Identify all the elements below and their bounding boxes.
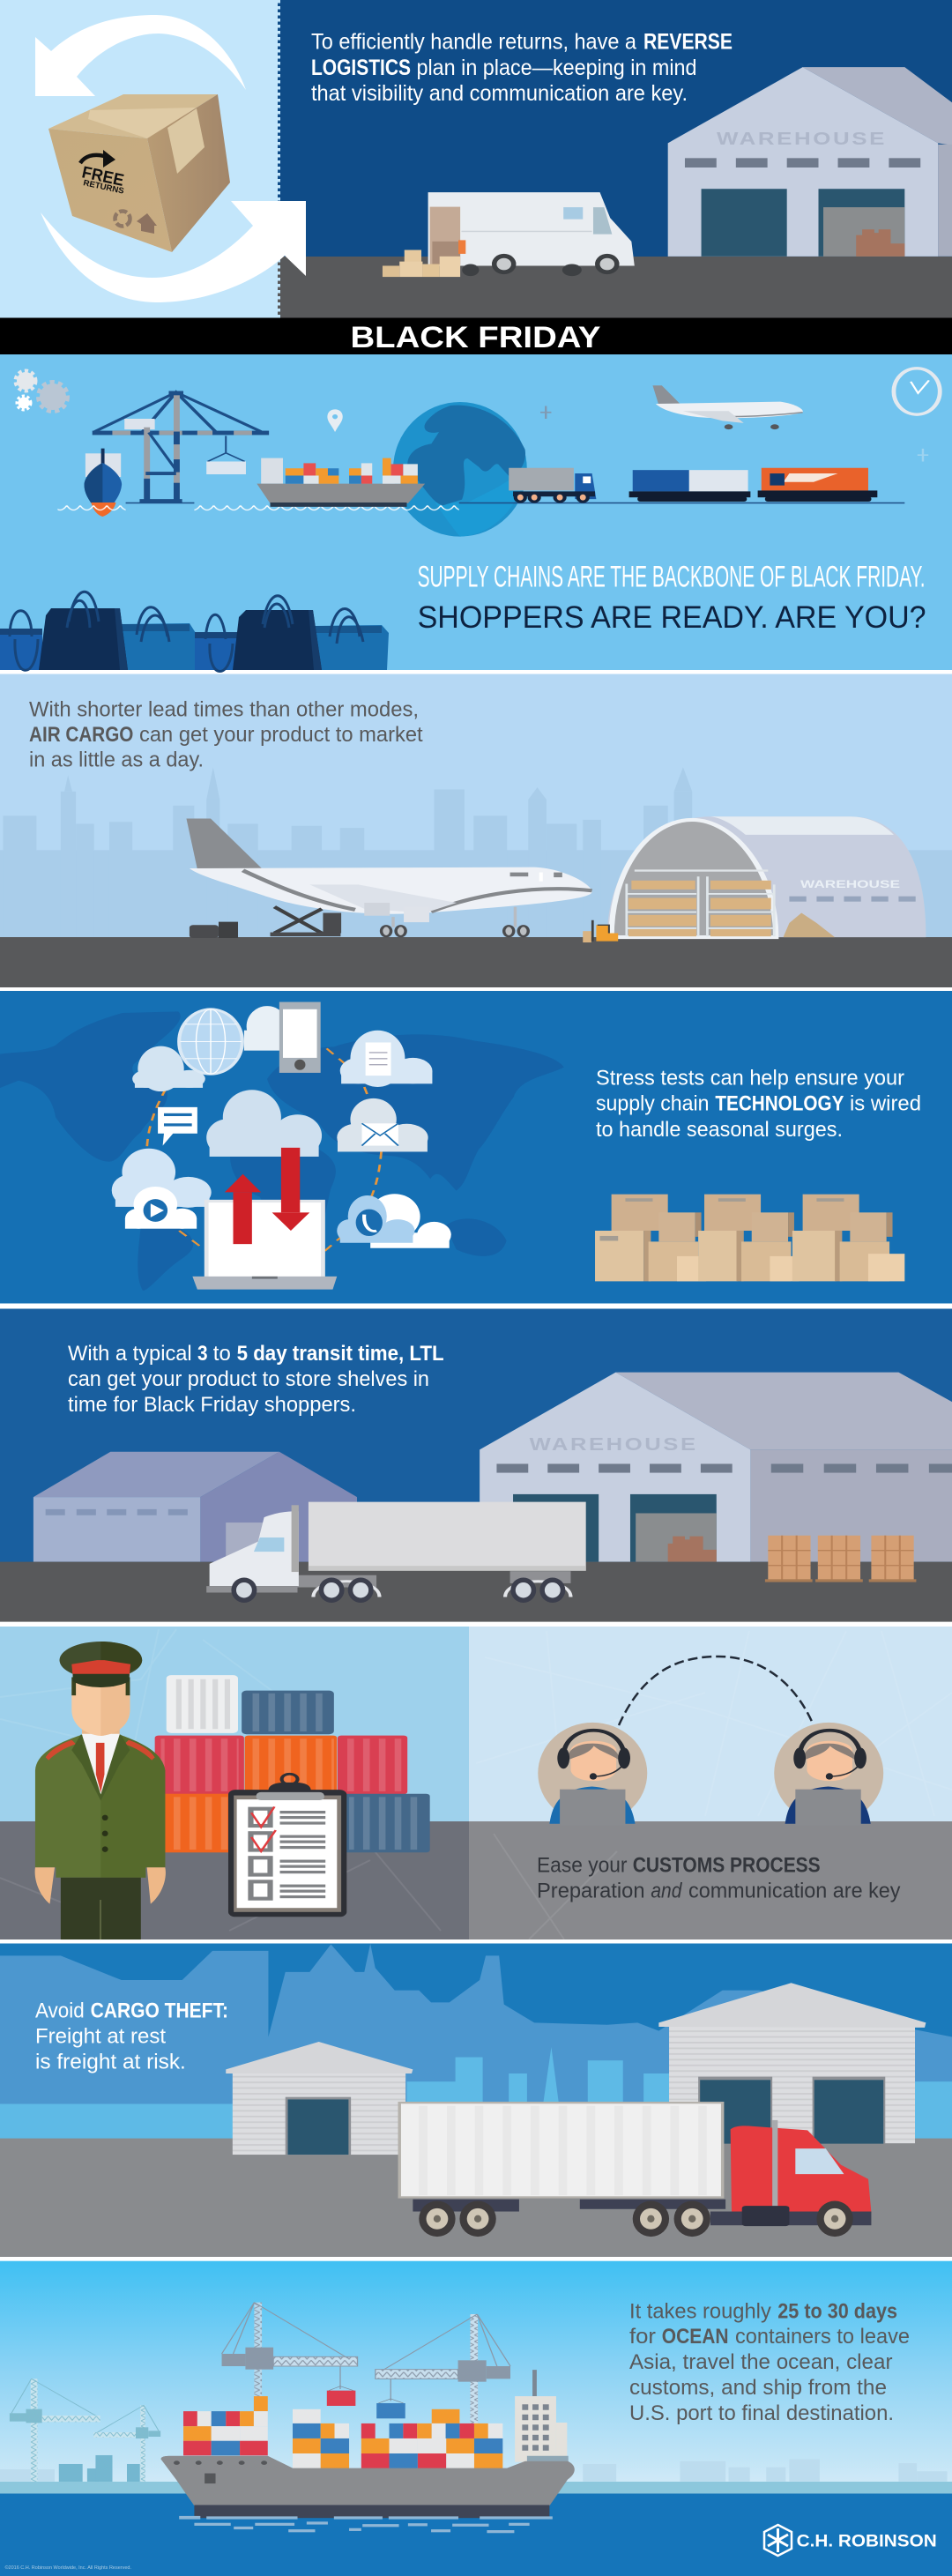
text: LTL: can get your product to store shelves in — [68, 1367, 429, 1391]
arrow: download — [272, 1148, 309, 1231]
text: technology: supply chain — [596, 1092, 709, 1116]
text: LTL: With a typical — [68, 1342, 192, 1366]
icon: forklift — [583, 920, 618, 942]
text: customs process: and — [651, 1880, 682, 1903]
icon: airplane — [652, 385, 803, 429]
icon: parcels — [383, 250, 460, 277]
icon: gears — [16, 371, 67, 411]
arrow: dashed connection arc — [619, 1657, 813, 1725]
icon: central cloud — [206, 1090, 322, 1157]
faint network lines — [0, 1629, 952, 1939]
warehouse sign: WAREHOUSE — [800, 878, 900, 890]
icon: call agent right — [774, 1723, 883, 1826]
icon: location pin — [327, 409, 343, 432]
arrow: upload — [225, 1174, 261, 1244]
icon: clock — [894, 369, 940, 414]
text: technology: is wired — [850, 1092, 921, 1116]
icon: stacked cartons — [595, 1195, 904, 1281]
text: technology: TECHNOLOGY — [715, 1092, 844, 1116]
icon: cloud left — [132, 1046, 205, 1091]
panel: reverse logistics — [0, 0, 952, 318]
icon: delivery van — [428, 192, 635, 276]
text: reverse logistics: REVERSE — [643, 30, 733, 55]
text: ocean transit: for — [629, 2325, 656, 2349]
text: cargo theft: Avoid — [35, 1999, 85, 2022]
icon: freight train — [629, 468, 877, 502]
icon: LTL truck — [206, 1502, 586, 1603]
icon: phone clouds — [337, 1194, 451, 1248]
icon: laptop — [192, 1201, 337, 1290]
icon: warehouse — [668, 67, 952, 257]
icon: plus marks — [540, 406, 928, 461]
icon: shopping bags — [0, 592, 389, 672]
panel: technology — [0, 991, 952, 1303]
text: cargo theft: Freight at rest — [35, 2024, 166, 2048]
icon: stacked containers — [155, 1675, 430, 1852]
text: air cargo: in as little as a day. — [29, 748, 204, 772]
heading: shoppers ready: SHOPPERS ARE READY. ARE YOU? — [418, 600, 926, 635]
text: technology — [596, 1067, 921, 1142]
text: ocean transit: Asia, travel the ocean, clear — [629, 2350, 893, 2374]
text: ocean transit: 25 to 30 days — [777, 2300, 897, 2324]
warehouse sign: WAREHOUSE — [530, 1435, 698, 1455]
text: customs process: Ease your — [537, 1853, 628, 1878]
icon: waves and route line — [57, 503, 904, 511]
icon: arched warehouse — [607, 816, 926, 937]
text: LTL: to — [213, 1342, 231, 1366]
icon: globe — [393, 402, 527, 537]
text: reverse logistics: that visibility and communication are key. — [311, 81, 688, 106]
text: cargo theft: CARGO THEFT: — [91, 1999, 228, 2022]
icon: small warehouse — [226, 2042, 413, 2155]
water ripples — [179, 2516, 553, 2533]
icon: small warehouse — [33, 1452, 357, 1562]
panel: supply chain backbone — [0, 354, 952, 672]
ground — [0, 2139, 952, 2257]
icon: free returns box: FREE — [80, 163, 125, 190]
text: ocean transit — [629, 2300, 910, 2425]
heading: black friday band — [0, 317, 952, 354]
logo: C.H. Robinson: C.H. ROBINSON — [797, 2532, 937, 2550]
text: reverse logistics — [311, 30, 733, 106]
text: cargo theft: is freight at risk. — [35, 2050, 186, 2073]
icon: video clouds — [112, 1149, 212, 1229]
text: ocean transit: containers to leave — [735, 2325, 910, 2349]
ground — [0, 1562, 952, 1622]
text: LTL: 3 — [197, 1342, 208, 1366]
ground — [0, 937, 952, 987]
icon: smartphone — [279, 1002, 321, 1073]
text: ocean transit: customs, and ship from the — [629, 2376, 887, 2400]
text: LTL: 5 day transit time, LTL — [237, 1342, 444, 1366]
text: reverse logistics: plan in place—keeping in mind — [416, 56, 696, 80]
icon: pallets — [765, 1536, 916, 1582]
text: cargo theft — [35, 1999, 228, 2073]
text: air cargo: can get your product to market — [139, 723, 423, 747]
icon: cargo airplane — [186, 819, 592, 936]
icon: cloud behind phone — [244, 1006, 287, 1051]
distant skyline — [0, 2459, 948, 2482]
icon: cloud with document — [340, 1031, 432, 1087]
icon: port crane — [93, 391, 269, 503]
icon: clipboard checklist — [228, 1774, 346, 1917]
icon: free returns box: RETURNS — [82, 178, 125, 197]
panel: ocean freight — [0, 2261, 952, 2576]
city skyline — [0, 1944, 952, 2140]
arrow: return bottom — [41, 201, 306, 302]
text: customs process: communication are key — [688, 1880, 901, 1903]
text: air cargo — [29, 698, 423, 772]
heading: black friday band: BLACK FRIDAY — [351, 321, 601, 354]
icon: small vessel front — [85, 449, 122, 517]
text: air cargo: With shorter lead times than other modes, — [29, 698, 419, 722]
text: LTL: time for Black Friday shoppers. — [68, 1393, 356, 1417]
icon: cloud with envelope — [337, 1098, 428, 1151]
icon: container ship — [161, 2370, 575, 2518]
icon: ground loader — [190, 907, 341, 938]
logo: C.H. Robinson — [764, 2525, 937, 2556]
icon: free returns box — [48, 94, 230, 252]
text: reverse logistics: To efficiently handle returns, have a — [311, 30, 636, 55]
text: reverse logistics: LOGISTICS — [311, 56, 411, 80]
distant buildings — [59, 2455, 140, 2482]
icon: harbor cranes — [222, 2303, 510, 2424]
icon: truck — [509, 468, 596, 503]
icon: large warehouse — [658, 1983, 926, 2144]
panel: air cargo — [0, 674, 952, 987]
icon: globe bubble — [179, 1009, 242, 1074]
text: LTL — [68, 1342, 444, 1417]
text: customs process: CUSTOMS PROCESS — [633, 1853, 821, 1878]
text: customs process — [537, 1853, 901, 1903]
icon: network clouds — [112, 1002, 451, 1290]
world map — [0, 1011, 564, 1291]
icon: chat bubble — [158, 1107, 197, 1146]
panel: cargo theft — [0, 1943, 952, 2257]
icon: hanging containers — [327, 2386, 405, 2418]
city skyline — [0, 767, 952, 937]
icon: hanging container — [206, 436, 246, 474]
text: technology: to handle seasonal surges. — [596, 1118, 843, 1142]
icon: call agent left — [538, 1723, 647, 1826]
connector dashes — [147, 1031, 382, 1251]
copyright note: ©2016 C.H. Robinson Worldwide, Inc. All Rights Reserved. — [5, 2565, 131, 2571]
text: technology: Stress tests can help ensure your — [596, 1067, 904, 1091]
panel: customs process — [0, 1627, 952, 1939]
icon: cargo ship — [257, 458, 425, 507]
text: ocean transit: U.S. port to final destination. — [629, 2401, 894, 2425]
text: customs process: Preparation — [537, 1880, 645, 1903]
icon: red truck — [399, 2103, 871, 2237]
text: air cargo: AIR CARGO — [29, 723, 133, 747]
icon: distant cranes — [10, 2379, 160, 2482]
text: ocean transit: It takes roughly — [629, 2300, 771, 2324]
warehouse sign: WAREHOUSE — [717, 130, 887, 149]
icon: large warehouse — [480, 1373, 952, 1562]
arrow: return top — [35, 15, 246, 96]
panel: LTL — [0, 1308, 952, 1622]
text: ocean transit: OCEAN — [662, 2325, 728, 2349]
icon: customs officer — [35, 1642, 166, 1939]
